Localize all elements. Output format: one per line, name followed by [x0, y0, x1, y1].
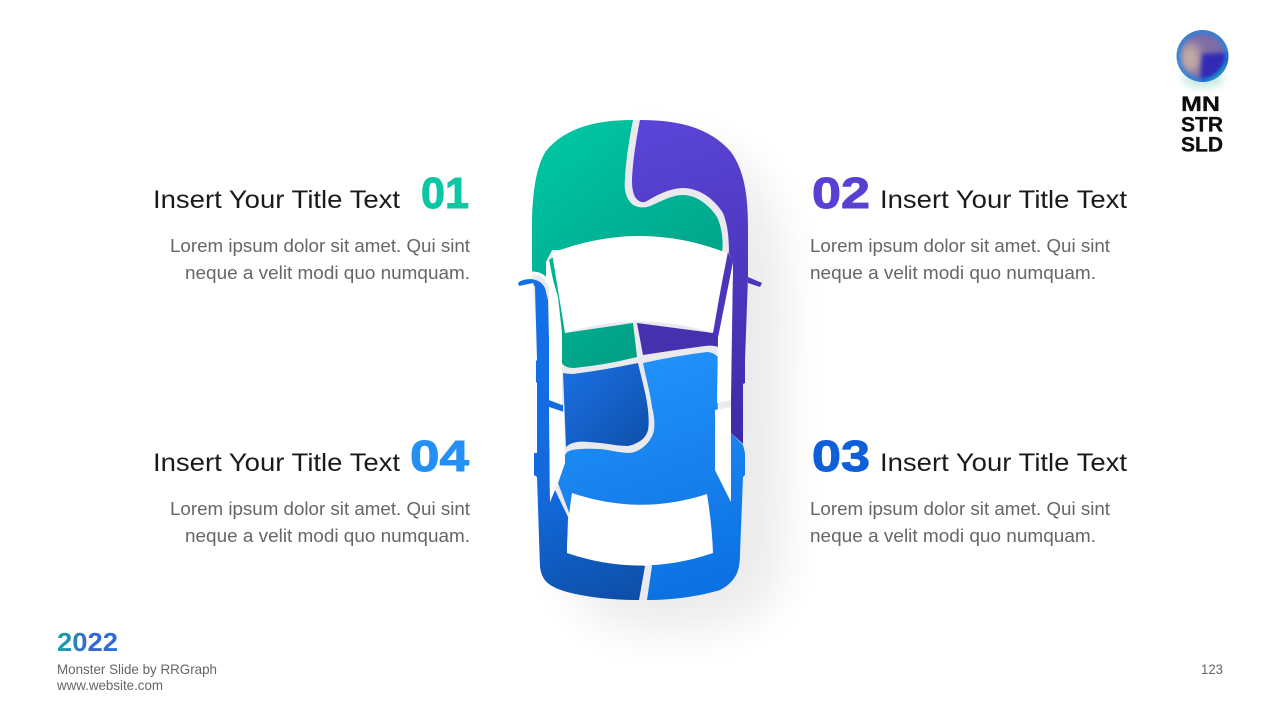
footer year: 2022 — [57, 627, 118, 657]
logo wordmark: SLD — [1181, 134, 1223, 156]
windshield — [552, 236, 727, 333]
panel: item 04 — [153, 432, 470, 546]
car section: purple top — [632, 120, 748, 444]
text block 03 — [810, 499, 1110, 546]
logo wordmark: MN — [1181, 93, 1220, 116]
car section: green lower — [549, 255, 637, 368]
side window: rear left — [549, 407, 565, 502]
rear window — [567, 493, 713, 566]
pillar gap: left — [546, 260, 558, 297]
number 04: 04 — [410, 432, 470, 481]
side window: front right — [717, 263, 733, 403]
car section: blue left and rear-left — [518, 279, 645, 600]
logo — [1176, 30, 1232, 156]
text block 03: Lorem ipsum dolor sit amet. Qui sint — [810, 499, 1110, 519]
footer website: www.website.com — [56, 677, 163, 693]
mirror gap: left — [532, 273, 556, 297]
text block 04: neque a velit modi quo numquam. — [185, 526, 470, 546]
car illustration — [518, 120, 785, 630]
number 03: 03 — [812, 432, 870, 481]
footer — [56, 627, 1223, 693]
logo shadow — [1182, 70, 1224, 88]
title 02: Insert Your Title Text — [880, 186, 1127, 214]
page number: 123 — [1201, 661, 1223, 677]
side window: front left — [549, 287, 562, 405]
panel: item 03 — [810, 432, 1127, 546]
text block 04: Lorem ipsum dolor sit amet. Qui sint — [170, 499, 470, 519]
title 04: Insert Your Title Text — [153, 449, 400, 477]
footer credit: Monster Slide by RRGraph — [57, 661, 217, 677]
panel: item 01 — [153, 169, 470, 283]
text block 02: Lorem ipsum dolor sit amet. Qui sint — [810, 236, 1110, 256]
car section: dark blue centre-left — [563, 363, 649, 447]
side window: rear right — [715, 407, 731, 502]
car section: purple lower — [637, 323, 718, 355]
car section: light blue right — [558, 352, 745, 600]
car base gap — [532, 120, 748, 600]
text block 02 — [810, 236, 1110, 283]
text block 01: neque a velit modi quo numquam. — [185, 263, 470, 283]
car shadow — [570, 145, 785, 630]
text block 01 — [170, 236, 470, 283]
number 02: 02 — [812, 169, 870, 218]
panel: item 02 — [810, 169, 1127, 283]
car section: green top — [532, 120, 723, 279]
number 01: 01 — [421, 169, 469, 218]
text block 01: Lorem ipsum dolor sit amet. Qui sint — [170, 236, 470, 256]
logo wordmark — [1181, 93, 1223, 156]
title 01: Insert Your Title Text — [153, 186, 400, 214]
text block 03: neque a velit modi quo numquam. — [810, 526, 1096, 546]
text block 02: neque a velit modi quo numquam. — [810, 263, 1096, 283]
logo wordmark: STR — [1181, 114, 1223, 136]
car section: purple sliver — [712, 252, 733, 338]
title 03: Insert Your Title Text — [880, 449, 1127, 477]
text block 04 — [170, 499, 470, 546]
car mirror: right — [748, 277, 762, 287]
logo ball — [1176, 30, 1232, 84]
